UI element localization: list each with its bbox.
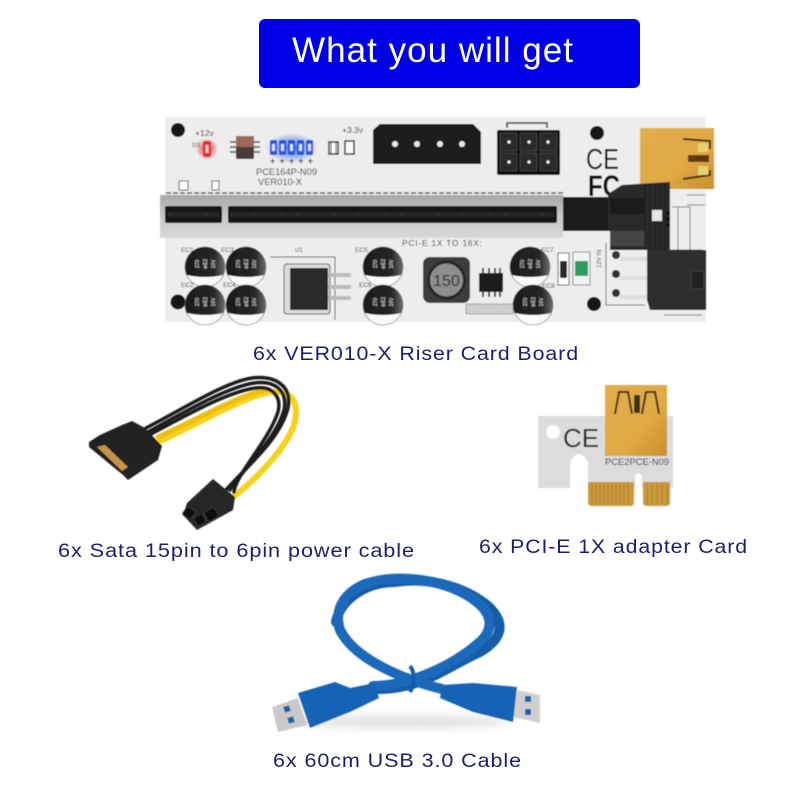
chip U2 bbox=[479, 268, 503, 297]
capacitor EC4: 16V bbox=[252, 297, 258, 306]
caption: adapter card: 6x PCI-E 1X adapter Card bbox=[479, 537, 748, 558]
capacitor EC3: EC3 bbox=[221, 247, 234, 254]
PCI-E 1X adapter card: CE bbox=[563, 423, 599, 453]
capacitor EC7 bbox=[510, 247, 554, 287]
capacitor EC4 bbox=[223, 282, 266, 325]
voltage regulator U1: U1 bbox=[295, 248, 303, 254]
black power socket bbox=[647, 250, 706, 310]
capacitor EC8: 16V bbox=[539, 297, 545, 306]
left USB plug bbox=[272, 682, 379, 732]
caption: SATA cable: 6x Sata 15pin to 6pin power cable bbox=[58, 541, 415, 562]
capacitor EC5 bbox=[355, 247, 403, 287]
capacitor EC4: 270 bbox=[236, 298, 242, 306]
capacitor EC3: ⊕E2 bbox=[244, 259, 250, 269]
certification marks bbox=[586, 144, 620, 203]
circuit traces by socket bbox=[664, 195, 705, 315]
inductor L1 bbox=[423, 257, 470, 303]
capacitor EC6: 270 bbox=[373, 298, 379, 306]
capacitor EC2: 270 bbox=[195, 298, 201, 306]
capacitor EC4: ⊕E2 bbox=[244, 297, 250, 307]
certification marks: FC bbox=[588, 170, 620, 203]
capacitor EC5: EC5 bbox=[355, 247, 368, 254]
capacitor EC5: 270 bbox=[373, 260, 379, 268]
adapter model label: PCE2PCE-N09 bbox=[605, 457, 669, 468]
capacitor EC8: EC8 bbox=[542, 283, 555, 290]
capacitor EC3: 16V bbox=[252, 259, 258, 268]
capacitor EC3 bbox=[221, 247, 266, 287]
caption: USB cable: 6x 60cm USB 3.0 Cable bbox=[273, 751, 522, 772]
capacitor EC8: ⊕E2 bbox=[531, 297, 537, 307]
red power LED: D3 bbox=[192, 143, 200, 149]
capacitor EC8 bbox=[513, 283, 555, 325]
capacitor EC2: EC2 bbox=[181, 282, 194, 289]
capacitor EC1: 16V bbox=[211, 259, 217, 268]
six pin plug bbox=[182, 479, 235, 530]
small components near 3.3v bbox=[166, 125, 563, 193]
capacitor EC6 bbox=[359, 282, 403, 325]
gold edge contacts bbox=[588, 482, 670, 506]
board silkscreen heading: PCI-E 1X TO 16X: bbox=[402, 238, 482, 248]
board model label bbox=[256, 167, 317, 187]
chip U3 bbox=[230, 136, 260, 159]
SATA plug bbox=[89, 421, 162, 480]
capacitor EC1: 270 bbox=[195, 260, 201, 268]
blue status LEDs: +++++ bbox=[270, 156, 313, 166]
green fuse bbox=[573, 252, 590, 285]
PCI-E slot bbox=[160, 195, 563, 238]
voltage regulator U1 bbox=[270, 248, 351, 320]
capacitor EC1: EC1 bbox=[181, 247, 194, 254]
red power LED bbox=[192, 128, 218, 160]
riser card board bbox=[160, 117, 714, 325]
black latch housing bbox=[608, 182, 670, 250]
blue USB 3.0 cable bbox=[272, 579, 540, 732]
small components near 3.3v: +3.3v bbox=[342, 125, 364, 135]
resistor array bbox=[466, 304, 513, 314]
PCI-E 1X adapter card bbox=[538, 385, 673, 506]
capacitor EC6: ⊕E2 bbox=[381, 297, 387, 307]
inductor L1: 150 bbox=[433, 273, 460, 290]
header pins: 12V IN bbox=[597, 250, 603, 268]
yellow wires bbox=[158, 390, 296, 498]
cable tie bbox=[410, 666, 414, 692]
slot latch bbox=[563, 197, 612, 231]
title banner bbox=[259, 19, 640, 88]
cable shadow bbox=[300, 715, 510, 729]
capacitor EC5: ⊕E2 bbox=[381, 259, 387, 269]
board body bbox=[165, 117, 706, 322]
capacitor EC7: EC7 bbox=[541, 247, 554, 254]
capacitor EC1: ⊕E2 bbox=[203, 259, 209, 269]
title banner: What you will get bbox=[292, 31, 574, 70]
board model label: PCE164P-N09 bbox=[256, 167, 317, 177]
capacitor EC5: 16V bbox=[389, 259, 395, 268]
right USB plug bbox=[440, 683, 540, 723]
capacitor EC7: 16V bbox=[536, 259, 542, 268]
certification marks: CE bbox=[586, 144, 619, 176]
cable loop bbox=[336, 579, 500, 689]
gold USB socket bbox=[605, 385, 667, 456]
board model label: VER010-X bbox=[258, 177, 302, 187]
capacitor EC7: 270 bbox=[520, 260, 526, 268]
capacitor EC3: 270 bbox=[236, 260, 242, 268]
four pin molex connector bbox=[373, 124, 481, 164]
diode D bbox=[558, 253, 569, 285]
mounting holes bbox=[170, 123, 604, 311]
red power LED: +12v bbox=[195, 128, 214, 138]
capacitor EC2 bbox=[181, 282, 225, 325]
capacitor EC4: EC4 bbox=[223, 282, 236, 289]
capacitor EC8: 270 bbox=[523, 298, 529, 306]
six pin power connector bbox=[497, 123, 560, 175]
blue status LEDs bbox=[266, 133, 318, 166]
capacitor EC2: ⊕E2 bbox=[203, 297, 209, 307]
capacitor EC2: 16V bbox=[211, 297, 217, 306]
caption: riser board: 6x VER010-X Riser Card Board bbox=[253, 344, 579, 365]
USB socket bbox=[640, 128, 714, 189]
capacitor EC7: ⊕E2 bbox=[528, 259, 534, 269]
capacitor EC1 bbox=[181, 247, 225, 287]
black wires bbox=[146, 378, 289, 492]
header pins bbox=[597, 243, 648, 305]
adapter PCB bbox=[538, 416, 673, 488]
capacitor EC6: EC6 bbox=[359, 282, 372, 289]
SATA to 6 pin cable bbox=[89, 378, 296, 530]
capacitor EC6: 16V bbox=[389, 297, 395, 306]
